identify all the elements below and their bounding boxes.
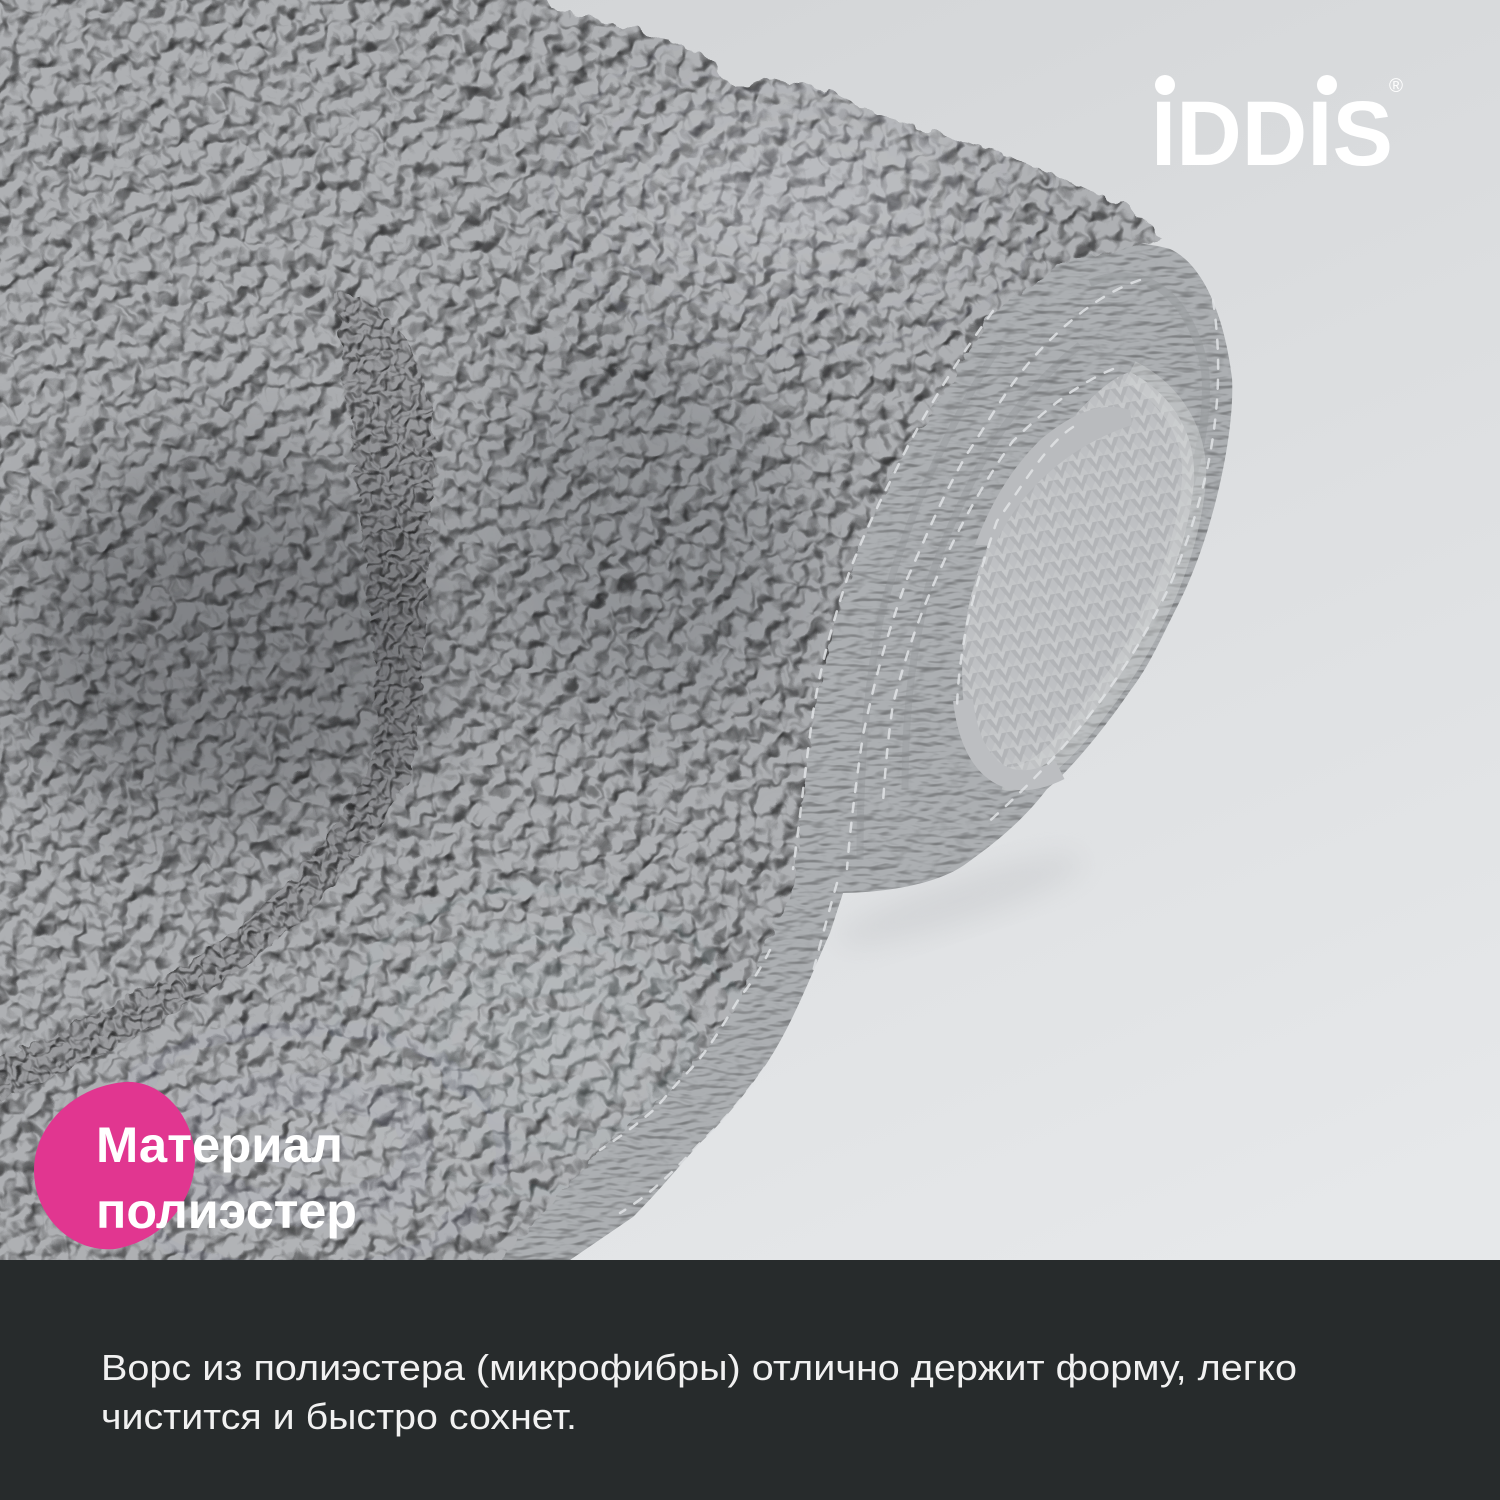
- rubber underside with triangular pattern: [962, 372, 1194, 780]
- heading: material: полиэстер: [96, 1183, 357, 1239]
- pink blob accent: [34, 1082, 195, 1249]
- description text: чистится и быстро сохнет.: [101, 1396, 577, 1437]
- white stitched seams: [600, 280, 1218, 1213]
- description text: [101, 1347, 1297, 1437]
- heading: material: [96, 1117, 357, 1239]
- floor shadow below roll: [830, 839, 1090, 961]
- logo wordmark: IDDIS: [1151, 83, 1393, 185]
- mat pile surface: [0, 0, 1180, 1280]
- dark description band: [0, 1260, 1500, 1500]
- registered mark: ®: [1389, 76, 1403, 97]
- soft shading of the pile: [0, 350, 810, 830]
- description text: Ворс из полиэстера (микрофибры) отлично держит форму, легко: [101, 1347, 1297, 1388]
- photo: bath mat roll: [0, 0, 1250, 1280]
- tighter loop-pile strip: [0, 280, 460, 1120]
- logo dots: [1155, 75, 1337, 95]
- mat edge binding and folded layers: [502, 244, 1232, 1260]
- heading: material: Материал: [96, 1117, 343, 1173]
- logo: IDDIS: [1151, 75, 1403, 185]
